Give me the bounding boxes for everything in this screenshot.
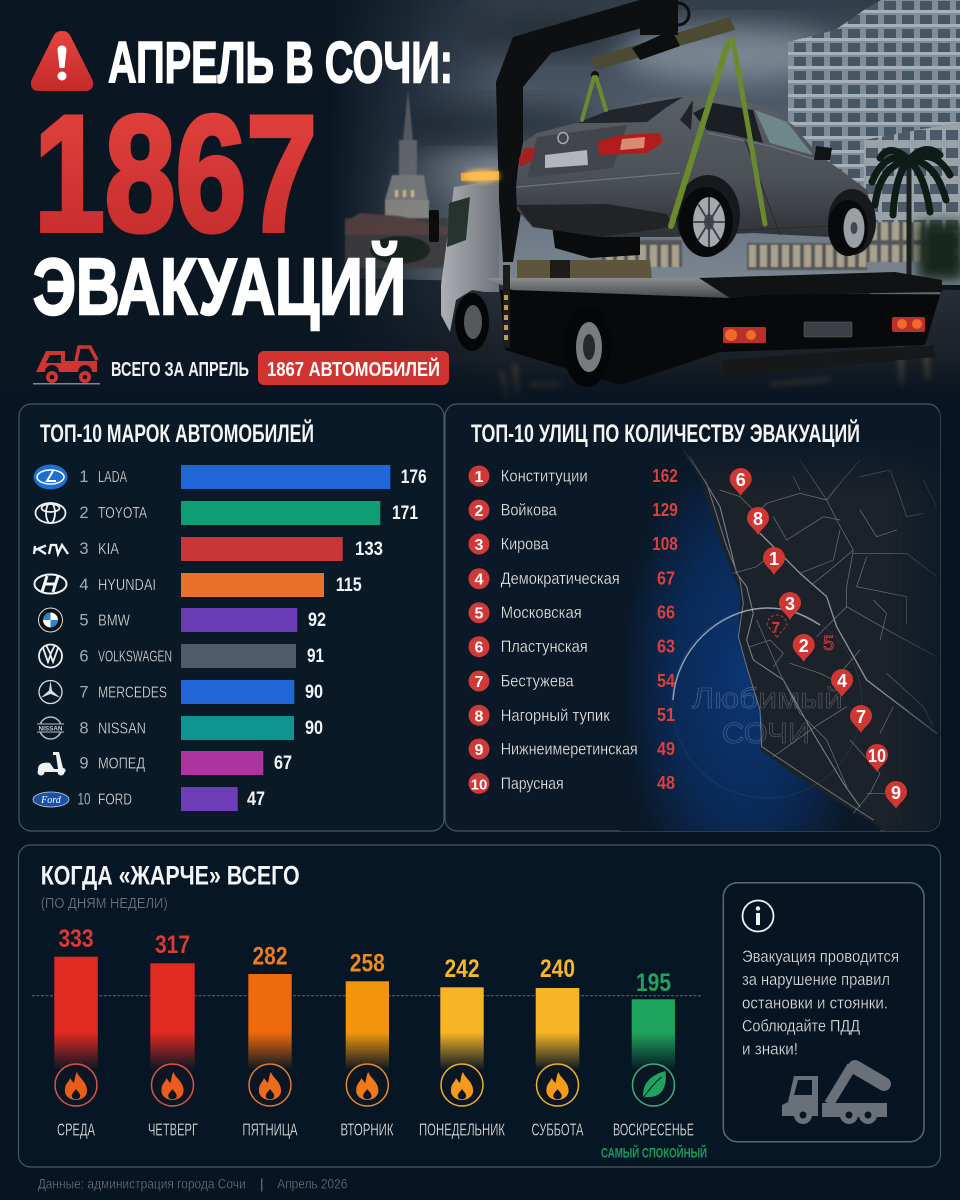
row: FORD: 47: [247, 789, 265, 810]
map of Sochi: [620, 405, 950, 837]
street list: 9: [475, 742, 484, 759]
row: FORD: FORD: [98, 792, 132, 808]
stormy sky: [346, 0, 960, 285]
street list: Конституции: [501, 466, 588, 486]
street list: 10: [471, 776, 487, 793]
street list: Демократическая: [501, 569, 620, 588]
street list: 129: [652, 499, 678, 520]
street list: 66: [657, 602, 675, 622]
info text: [742, 947, 899, 1058]
row: KIA: 133: [355, 539, 383, 560]
street list: [468, 465, 678, 794]
row: BMW: [38, 608, 326, 632]
panel heading: days: КОГДА «ЖАРЧЕ» ВСЕГО: [41, 860, 300, 890]
total badge: [258, 351, 449, 385]
row: LADA: LADA: [98, 469, 127, 486]
row: HYUNDAI: [34, 573, 362, 597]
ghost pin marks 7 and 5: 7: [772, 619, 780, 635]
street list: 162: [652, 465, 678, 486]
hero photo: tow truck lifting a car in rainy Sochi: [337, 0, 960, 396]
map pins: 9: [891, 783, 901, 803]
day: Wednesday: [54, 925, 98, 1140]
car rear window: [577, 97, 683, 123]
row: TOYOTA: 2: [79, 504, 89, 522]
day: Sunday: 195: [636, 969, 671, 997]
map pins: [730, 468, 907, 809]
info text: Эвакуация проводится: [742, 947, 899, 966]
map pins: 8: [753, 509, 763, 529]
truck wheels: [455, 293, 611, 387]
street list: 6: [475, 640, 484, 657]
info box: [723, 883, 924, 1142]
day: Thursday: [148, 931, 198, 1140]
row: VOLKSWAGEN: 6: [79, 648, 89, 666]
land: [680, 407, 950, 837]
map pins: 1: [769, 549, 779, 569]
day: Sunday: САМЫЙ СПОКОЙНЫЙ: [601, 1144, 707, 1160]
day: Wednesday: СРЕДА: [57, 1120, 95, 1140]
street list: 8: [475, 708, 484, 725]
left fade into background: [0, 0, 500, 405]
car side windows: [693, 103, 763, 143]
lifting straps: [582, 40, 765, 226]
map pins: 3: [785, 594, 795, 614]
street list: 54: [657, 670, 676, 691]
row: LADA: 176: [401, 467, 427, 488]
row: KIA: [34, 537, 383, 561]
road network: [683, 450, 937, 820]
street list: Пластунская: [501, 637, 588, 656]
street list: 2: [475, 503, 484, 520]
day: Thursday: ЧЕТВЕРГ: [148, 1120, 198, 1140]
panel: busiest days of the week: [18, 845, 940, 1167]
watermark bright arc: [673, 608, 820, 700]
background: high-rise buildings: [602, 0, 960, 280]
car tail lights: [597, 133, 663, 155]
street list: 63: [657, 636, 675, 656]
crane boom and spreader: [496, 0, 735, 262]
ghost pin marks 7 and 5: [767, 615, 834, 655]
row: MERCEDES: MERCEDES: [98, 684, 167, 702]
day: Saturday: [532, 955, 584, 1140]
day: Thursday: 317: [155, 931, 190, 959]
row: HYUNDAI: HYUNDAI: [98, 577, 156, 594]
day: Sunday: ВОСКРЕСЕНЬЕ: [613, 1120, 694, 1140]
row: FORD: Ford: [40, 795, 62, 806]
row: MERCEDES: [39, 680, 323, 704]
day: Wednesday: 333: [58, 925, 94, 953]
car bumper: [517, 204, 673, 237]
day: Monday: [419, 955, 506, 1140]
row: HYUNDAI: 115: [336, 575, 362, 596]
street list: Войкова: [501, 500, 557, 520]
day: Monday: 242: [444, 955, 480, 983]
row: moped: [38, 751, 292, 776]
info text: и знаки!: [742, 1039, 798, 1058]
icon: grey tow truck: [782, 1066, 887, 1124]
day: Friday: [242, 943, 298, 1140]
row: BMW: BMW: [98, 612, 131, 630]
row: KIA: KIA: [98, 541, 119, 558]
day: Saturday: СУББОТА: [532, 1120, 584, 1140]
reference line: [32, 995, 702, 997]
watermark: Любимый Сочи: [672, 608, 862, 798]
total caption: ВСЕГО ЗА АПРЕЛЬ: [111, 359, 249, 381]
headline word: эвакуаций: ЭВАКУАЦИЙ: [33, 241, 406, 331]
info text: Соблюдайте ПДД: [742, 1016, 860, 1035]
day: Friday: 282: [252, 943, 288, 971]
icon: info: [742, 900, 774, 932]
footer source: Апрель 2026: [277, 1176, 347, 1192]
panel subheading: (ПО ДНЯМ НЕДЕЛИ): [41, 895, 168, 912]
row: VOLKSWAGEN: VOLKSWAGEN: [98, 648, 172, 666]
row: TOYOTA: [36, 501, 418, 525]
street list: 7: [475, 674, 484, 691]
row: VOLKSWAGEN: [39, 644, 324, 668]
row: FORD: 10: [78, 790, 90, 808]
truck cab: [429, 170, 500, 332]
row: LADA: 1: [79, 468, 89, 486]
wet road: [348, 279, 960, 396]
car plate: [545, 150, 588, 168]
day: Friday: ПЯТНИЦА: [242, 1120, 298, 1140]
street list: Московская: [501, 603, 582, 622]
background: station tower: [345, 90, 448, 268]
street list: 108: [652, 533, 678, 554]
street list: 3: [475, 537, 484, 554]
row: NISSAN: 90: [305, 718, 323, 739]
street list: 49: [657, 738, 675, 759]
street list: 48: [657, 772, 675, 793]
day: Saturday: 240: [540, 955, 575, 983]
row: moped: 9: [79, 754, 89, 772]
ghost pin marks 7 and 5: 5: [823, 633, 834, 655]
info text: остановки и стоянки.: [742, 993, 888, 1012]
row: TOYOTA: 171: [392, 503, 418, 524]
street list: Нижнеимеретинская: [501, 740, 638, 758]
row: FORD: [33, 787, 265, 811]
panel: top-10 streets: [445, 404, 950, 837]
footer source: |: [260, 1176, 264, 1192]
map pins: 4: [837, 671, 847, 691]
row: MERCEDES: 7: [79, 684, 89, 702]
day: Monday: ПОНЕДЕЛЬНИК: [419, 1120, 506, 1140]
row: NISSAN: 8: [79, 720, 89, 738]
car wheels: [676, 175, 740, 255]
day: Tuesday: ВТОРНИК: [340, 1120, 394, 1140]
row: NISSAN: NISSAN: [38, 726, 63, 732]
panel: top-10 car brands: [19, 404, 444, 831]
row: moped: МОПЕД: [98, 756, 145, 772]
street list: 1: [475, 469, 484, 486]
row: moped: 67: [274, 753, 292, 774]
row: MERCEDES: 90: [305, 682, 323, 703]
row: NISSAN: [37, 716, 323, 740]
map pins: 7: [856, 707, 866, 727]
street list: 4: [475, 572, 484, 589]
footer source: Данные: администрация города Сочи: [38, 1176, 246, 1192]
icon: red tow truck: [33, 347, 100, 384]
warning icon: [31, 31, 93, 91]
headline number 1867: 1867: [34, 82, 317, 266]
row: KIA: 3: [79, 540, 89, 558]
row: VOLKSWAGEN: 91: [307, 646, 324, 667]
street list: Кирова: [501, 534, 549, 554]
street list: 5: [475, 606, 484, 623]
street list: Нагорный тупик: [501, 706, 610, 725]
map pins: 6: [736, 470, 746, 490]
info text: за нарушение правил: [742, 970, 890, 989]
lifted car: [516, 95, 876, 258]
map pins: 10: [868, 746, 886, 766]
row: LADA: [34, 464, 427, 490]
watermark: Любимый Сочи: СОЧИ: [722, 718, 810, 750]
map pins: 2: [799, 636, 809, 656]
row: HYUNDAI: 4: [79, 576, 89, 594]
watermark: Любимый Сочи: Любимый: [692, 683, 843, 715]
day: Tuesday: 258: [350, 950, 385, 978]
total badge: 1867 АВТОМОБИЛЕЙ: [267, 357, 440, 381]
row: BMW: 5: [79, 612, 89, 630]
row: TOYOTA: TOYOTA: [98, 505, 147, 522]
title: Апрель в Сочи: АПРЕЛЬ В СОЧИ:: [108, 30, 453, 96]
row: NISSAN: NISSAN: [98, 720, 146, 738]
truck chassis and platform: [485, 260, 942, 385]
street list: 51: [657, 704, 675, 725]
panel heading: brands: ТОП-10 МАРОК АВТОМОБИЛЕЙ: [40, 418, 314, 448]
day: Sunday: [601, 969, 707, 1160]
palm tree: [872, 150, 950, 275]
street list: Бестужева: [501, 672, 574, 690]
row: BMW: 92: [308, 610, 326, 631]
car boot panel: [527, 125, 627, 178]
street list: 67: [657, 568, 675, 588]
day: Tuesday: [340, 950, 394, 1140]
street list: Парусная: [501, 774, 564, 793]
